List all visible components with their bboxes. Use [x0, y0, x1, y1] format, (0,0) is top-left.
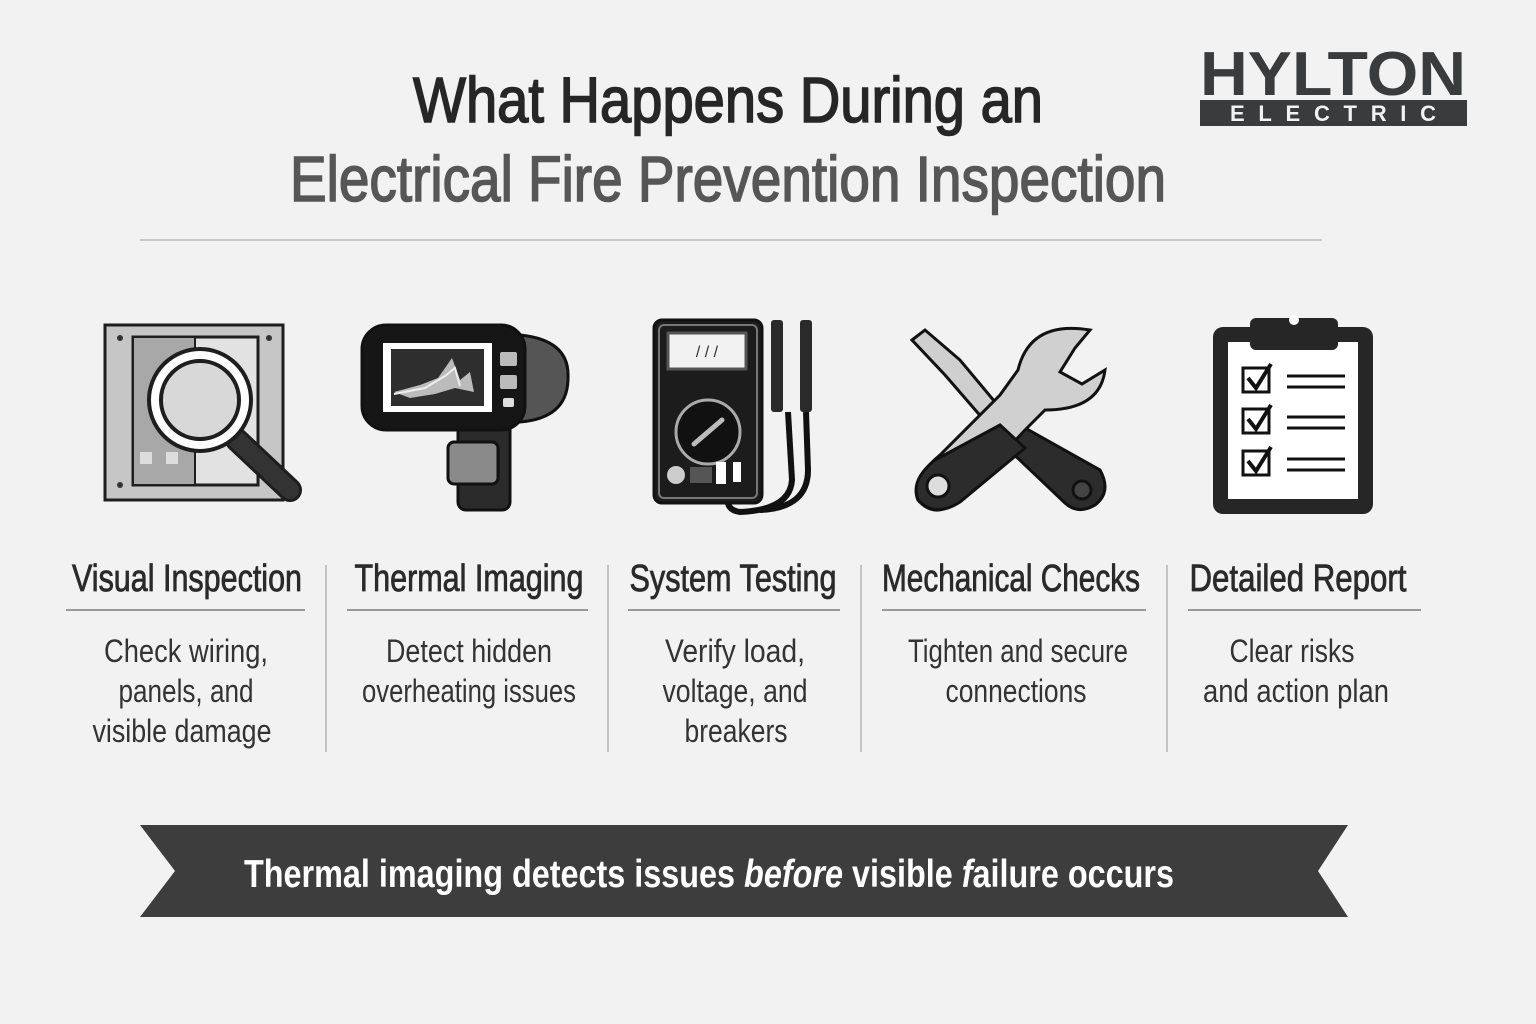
banner callout	[140, 825, 1348, 917]
step 3: system testing: breakers	[684, 713, 788, 749]
step 3: system testing: System Testing	[630, 558, 836, 600]
step 2: thermal imaging: overheating issues	[362, 673, 576, 709]
icon: multimeter	[654, 320, 812, 512]
step 5: detailed report	[1188, 558, 1421, 709]
step 1: visual inspection: Visual Inspection	[72, 558, 302, 600]
step 3: system testing: Verify load,	[665, 633, 805, 669]
step 2: thermal imaging	[347, 558, 588, 709]
icon: electrical panel with magnifier	[105, 325, 290, 500]
step 4: mechanical checks: Mechanical Checks	[882, 558, 1140, 600]
step 5: detailed report: and action plan	[1203, 673, 1389, 709]
icon: multimeter: / / /	[696, 344, 719, 361]
step 5: detailed report: Detailed Report	[1190, 558, 1407, 600]
step 2: thermal imaging: Thermal Imaging	[354, 558, 584, 600]
step 5: detailed report: Clear risks	[1230, 633, 1354, 669]
title: Electrical Fire Prevention Inspection	[290, 143, 1166, 215]
icon: screwdriver and wrench	[912, 328, 1105, 510]
step 3: system testing: voltage, and	[662, 673, 808, 709]
step 1: visual inspection: panels, and	[118, 673, 254, 709]
title	[290, 64, 1166, 215]
banner callout: Thermal imaging detects issues before visible failure occurs	[244, 853, 1174, 896]
step 4: mechanical checks: Tighten and secure	[908, 633, 1128, 669]
step 4: mechanical checks: connections	[946, 673, 1086, 709]
logo: Hylton Electric: HYLTON	[1200, 40, 1466, 109]
step 1: visual inspection	[66, 558, 305, 749]
step 1: visual inspection: Check wiring,	[104, 633, 268, 669]
step 1: visual inspection: visible damage	[92, 713, 272, 749]
logo: Hylton Electric: ELECTRIC	[1230, 101, 1436, 126]
step 2: thermal imaging: Detect hidden	[386, 633, 552, 669]
step 3: system testing	[628, 558, 840, 749]
icon: clipboard checklist	[1213, 315, 1373, 514]
title: What Happens During an	[413, 64, 1043, 136]
step 4: mechanical checks	[882, 558, 1146, 709]
icon: thermal camera	[362, 325, 568, 510]
column separators	[326, 565, 1167, 752]
